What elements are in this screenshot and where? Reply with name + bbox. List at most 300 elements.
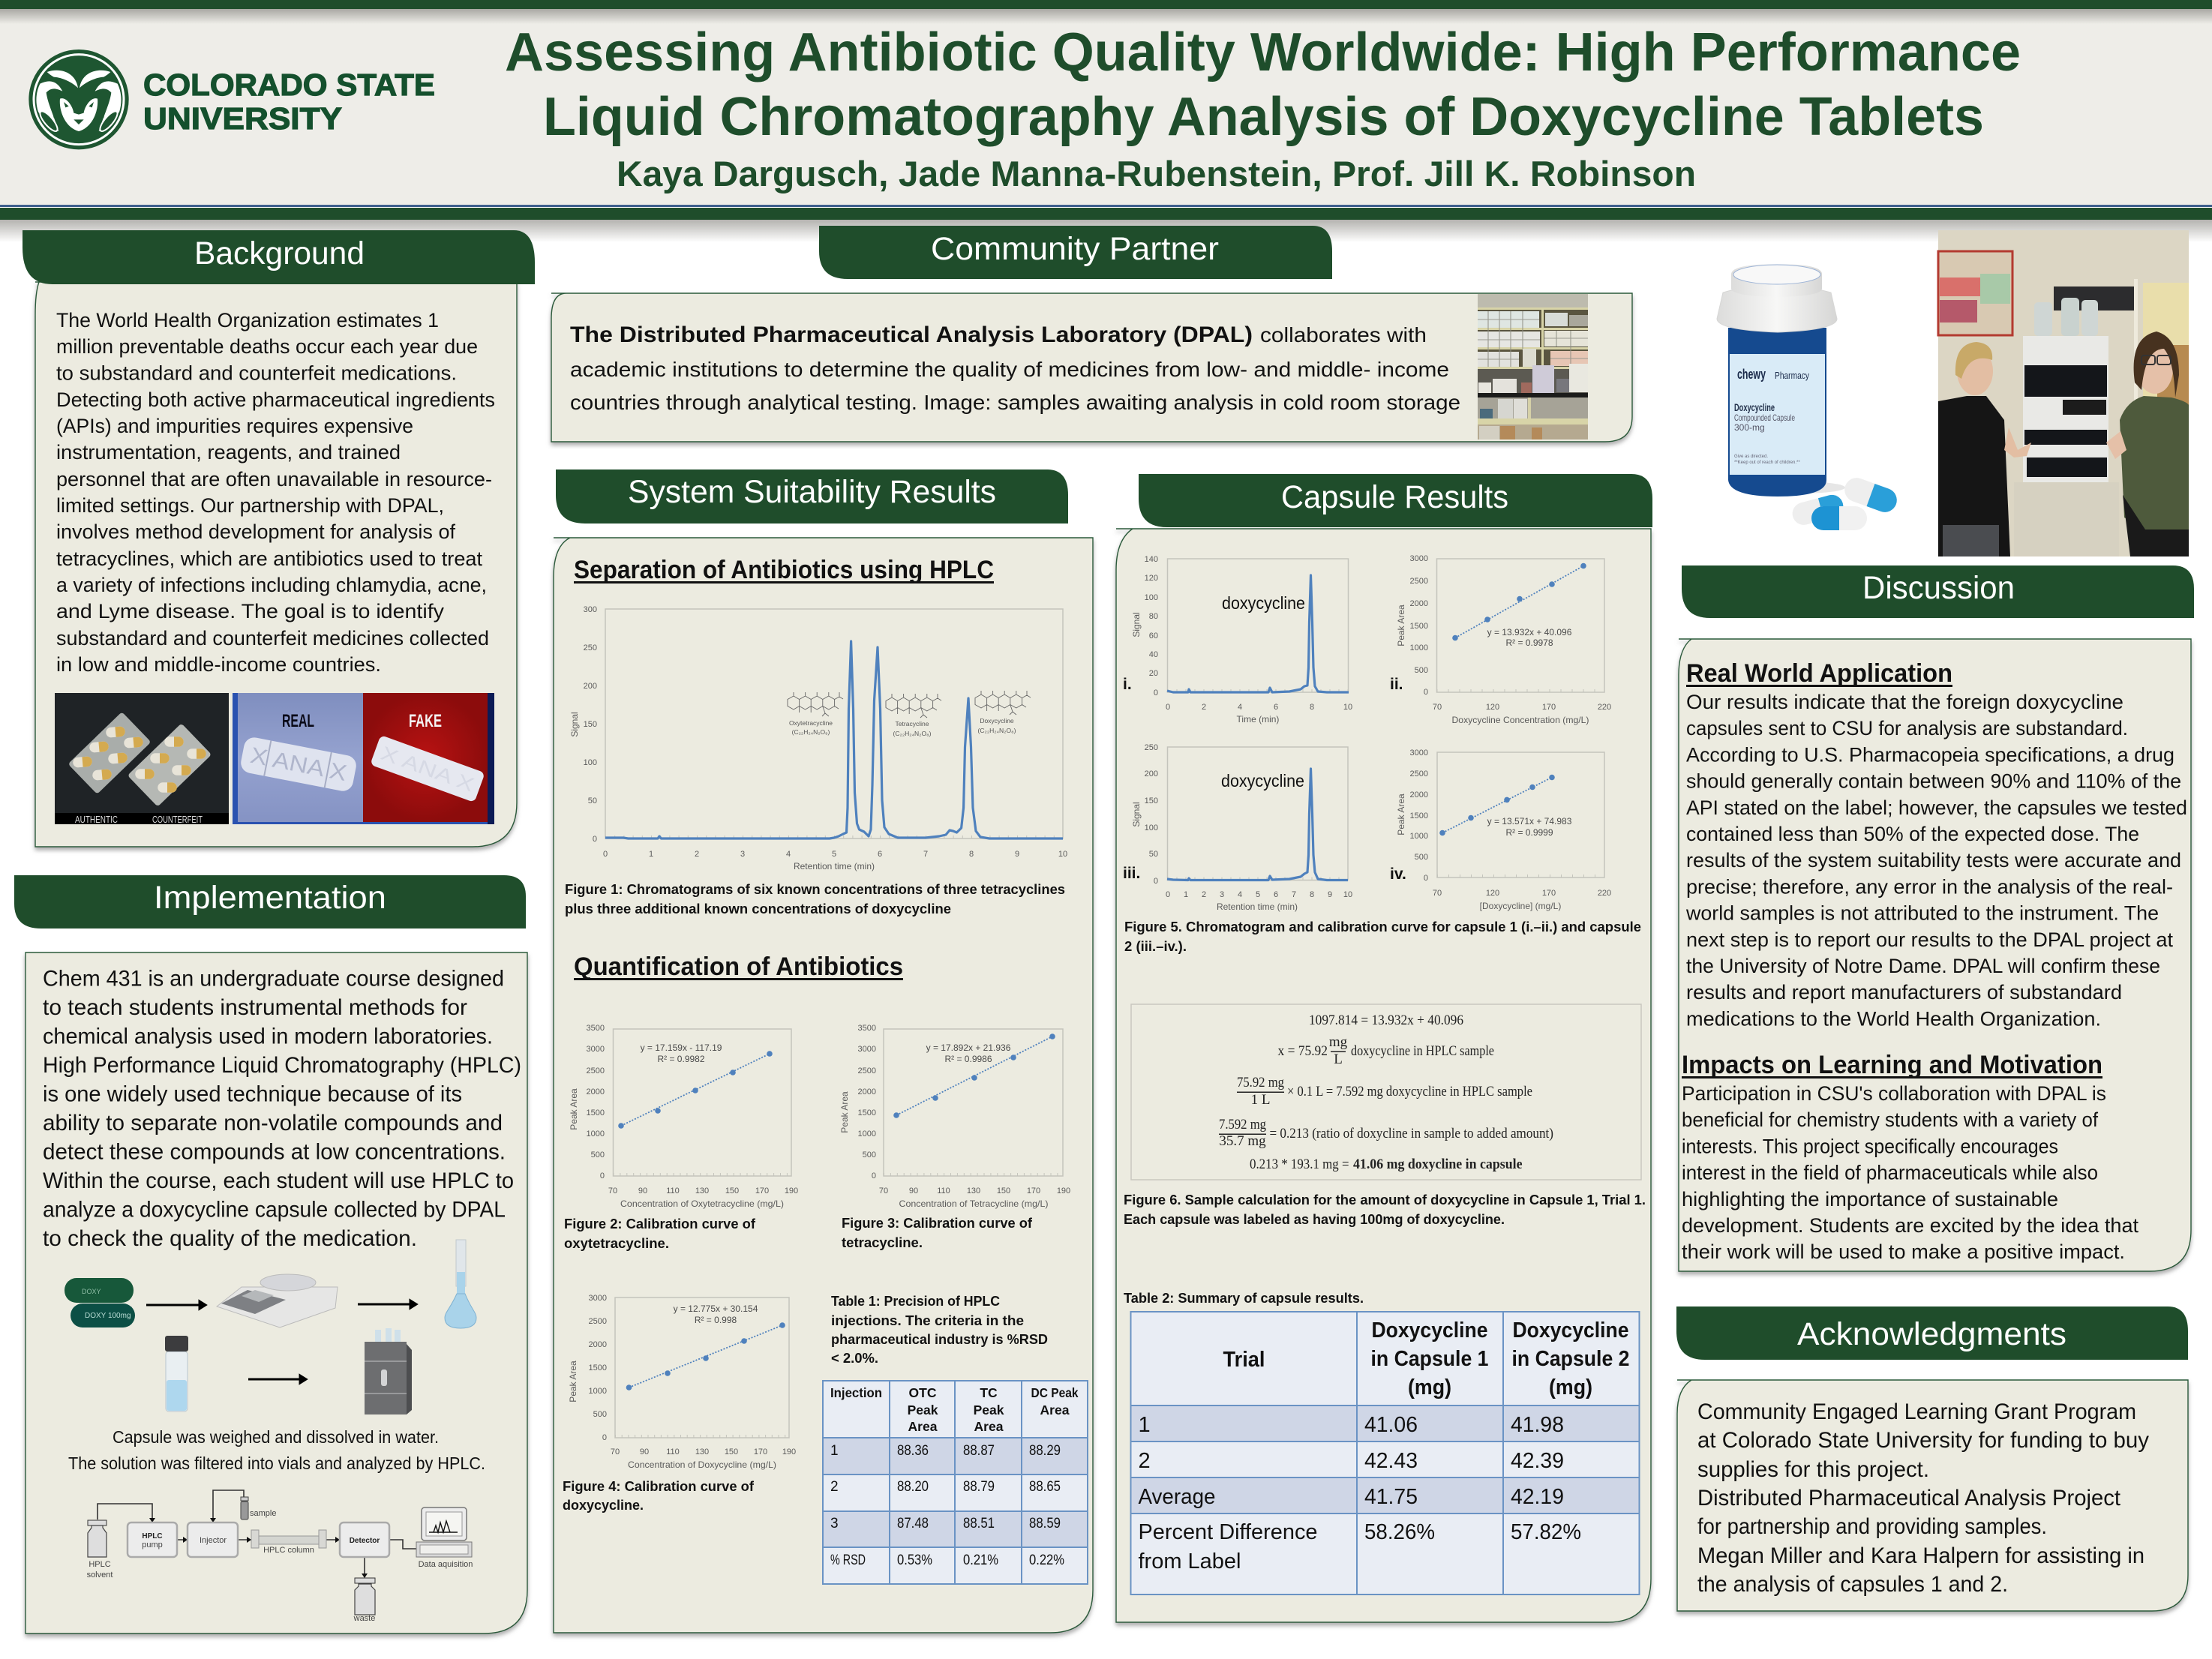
chart: figure 1 chromatogram: 150 <box>584 720 597 729</box>
section heading: real world application: Real World Application <box>1686 659 1952 688</box>
chart iv: capsule 2 calibration: [Doxycycline] (mg/L) <box>1480 901 1561 911</box>
chart: figure 2 calibration curve <box>569 1024 798 1209</box>
real world application text: medications to the World Health Organization. <box>1686 1008 2101 1030</box>
chart: figure 1 chromatogram: 50 <box>588 796 597 806</box>
chart: figure 1 chromatogram: 10 <box>1058 850 1067 859</box>
chart: figure 1 chromatogram: 2 <box>695 850 699 859</box>
table 1 caption <box>831 1294 1048 1366</box>
capsules <box>1790 475 1900 530</box>
university wordmark <box>143 68 435 136</box>
real world application text: results of the system suitability tests were accurate and <box>1686 849 2181 872</box>
real world application text: Our results indicate that the foreign doxycycline <box>1686 691 2123 713</box>
chart: figure 2 calibration curve: Concentration of Oxytetracycline (mg/L) <box>620 1198 784 1209</box>
table 1: precision of HPLC injections: TC <box>980 1385 998 1400</box>
table 1: precision of HPLC injections: 88.51 <box>963 1516 995 1532</box>
chart iv: capsule 2 calibration: 500 <box>1415 853 1428 862</box>
chart: figure 3 calibration curve: 190 <box>1057 1186 1070 1196</box>
table 2 caption: Table 2: Summary of capsule results. <box>1124 1291 1364 1306</box>
acknowledgments text: the analysis of capsules 1 and 2. <box>1697 1572 2008 1597</box>
section heading: separation: Separation of Antibiotics using HPLC <box>574 556 994 584</box>
system suitability heading <box>556 470 1068 524</box>
chart: figure 2 calibration curve: 2500 <box>587 1066 605 1076</box>
chart: figure 1 chromatogram: 6 <box>878 850 882 859</box>
student left <box>1938 342 2031 556</box>
chart: figure 1 chromatogram: Signal <box>569 712 580 737</box>
table 1: precision of HPLC injections: Peak <box>908 1402 938 1418</box>
chart ii: capsule 1 calibration: 70 <box>1433 703 1442 712</box>
figure 6: sample calculation: 1 L <box>1251 1092 1270 1108</box>
impacts text <box>1682 1082 2139 1263</box>
chart iii: capsule 2 chromatogram: 50 <box>1149 850 1158 859</box>
chart: figure 3 calibration curve: 3000 <box>858 1045 876 1054</box>
arrow <box>358 1300 416 1308</box>
chart iii: capsule 2 chromatogram: 100 <box>1145 824 1158 832</box>
chart: figure 4 calibration curve: 110 <box>666 1448 680 1456</box>
chart: figure 3 calibration curve: 2500 <box>858 1066 876 1076</box>
chart: figure 2 calibration curve: 3500 <box>587 1024 605 1033</box>
diagram: HPLC instrument schematic: pump <box>142 1540 163 1550</box>
chart: figure 4 calibration curve: 130 <box>695 1448 709 1456</box>
table 1: precision of HPLC injections: 87.48 <box>897 1516 929 1532</box>
chart iv: capsule 2 calibration: 120 <box>1486 889 1499 898</box>
panel: capsule results <box>1116 474 1652 1622</box>
table 2: summary of capsule results: 41.98 <box>1511 1413 1564 1437</box>
implementation text: ability to separate non-volatile compounds and <box>43 1111 503 1136</box>
table 2: summary of capsule results: 57.82% <box>1511 1520 1581 1544</box>
chart: figure 2 calibration curve: 150 <box>725 1186 739 1196</box>
chart ii: capsule 1 calibration: 170 <box>1542 703 1556 712</box>
capsule results heading: Capsule Results <box>1281 479 1508 515</box>
chart: figure 3 calibration curve: y = 17.892x + 21.936 <box>926 1042 1011 1053</box>
chart i: capsule 1 chromatogram <box>1123 555 1352 724</box>
figure 3 caption: tetracycline. <box>842 1235 923 1250</box>
background text: involves method development for analysis of <box>56 520 456 543</box>
chart i: capsule 1 chromatogram: 10 <box>1343 703 1352 712</box>
chart i: capsule 1 chromatogram: 0 <box>1166 703 1170 712</box>
background text: million preventable deaths occur each year due <box>56 335 478 358</box>
background text: in low and middle-income countries. <box>56 653 381 676</box>
chart ii: capsule 1 calibration <box>1390 554 1611 725</box>
background text: limited settings. Our partnership with DPAL, <box>56 494 444 517</box>
background text: and Lyme disease. The goal is to identify <box>56 600 445 622</box>
chart ii: capsule 1 calibration: 2000 <box>1410 599 1428 608</box>
photo: doxycycline pill bottle and capsules: 300-mg <box>1734 422 1765 433</box>
table 1: precision of HPLC injections: % RSD <box>830 1552 866 1568</box>
figure 5 caption: Figure 5. Chromatogram and calibration curve for capsule 1 (i.–ii.) and capsule <box>1124 920 1641 934</box>
real world application text: According to U.S. Pharmacopeia specifications, a drug <box>1686 744 2174 766</box>
table 2: summary of capsule results: 41.75 <box>1364 1485 1418 1509</box>
icon: ram head <box>29 50 129 149</box>
table 1: precision of HPLC injections: 88.36 <box>897 1443 929 1459</box>
community partner text: countries through analytical testing. Image: samples awaiting analysis in cold room storage <box>570 391 1460 414</box>
table 1: precision of HPLC injections: 1 <box>830 1443 839 1459</box>
community partner text: academic institutions to determine the quality of medicines from low- and middle- income <box>570 358 1449 381</box>
chart: figure 2 calibration curve: Peak Area <box>569 1088 579 1130</box>
chart i: capsule 1 chromatogram: 120 <box>1145 574 1158 583</box>
chart: figure 1 chromatogram <box>569 605 1067 872</box>
chart iii: capsule 2 chromatogram: 8 <box>1310 890 1314 899</box>
diagram: HPLC instrument schematic: Detector <box>350 1537 380 1545</box>
implementation text: to check the quality of the medication. <box>43 1226 417 1251</box>
chart i: capsule 1 chromatogram: 0 <box>1154 688 1158 698</box>
chart: figure 4 calibration curve <box>568 1294 796 1470</box>
chart: figure 3 calibration curve: 0 <box>872 1172 876 1180</box>
chart ii: capsule 1 calibration: Peak Area <box>1396 604 1406 646</box>
community partner heading <box>819 226 1332 279</box>
table 1: precision of HPLC injections: 88.59 <box>1029 1516 1061 1532</box>
chart iii: capsule 2 chromatogram: 150 <box>1145 796 1158 806</box>
figure 5 caption <box>1124 920 1641 954</box>
figure 3 caption <box>842 1216 1033 1250</box>
figure 6: sample calculation: 7.592 mg <box>1219 1117 1266 1132</box>
chart: figure 3 calibration curve: Peak Area <box>839 1091 850 1133</box>
photo: doxycycline pill bottle and capsules: **Keep out of reach of children.** <box>1734 460 1800 465</box>
figure 4 caption: doxycycline. <box>563 1498 644 1513</box>
table 1: precision of HPLC injections: Injection <box>830 1385 882 1400</box>
table 2: summary of capsule results: Doxycycline <box>1512 1318 1629 1342</box>
table 1: precision of HPLC injections: Area <box>908 1419 938 1434</box>
chart ii: capsule 1 calibration: 1500 <box>1410 622 1428 631</box>
implementation text <box>43 966 521 1251</box>
chart i: capsule 1 chromatogram: 4 <box>1238 703 1242 712</box>
table 1: precision of HPLC injections: Peak <box>974 1402 1004 1418</box>
impacts text: beneficial for chemistry students with a variety of <box>1682 1108 2099 1131</box>
chart i: capsule 1 chromatogram: i. <box>1123 676 1132 693</box>
table 2: summary of capsule results: Doxycycline <box>1371 1318 1488 1342</box>
real world application text: precise; therefore, any error in the analysis of the real- <box>1686 876 2173 898</box>
chart i: capsule 1 chromatogram: 80 <box>1149 612 1158 621</box>
photo: real vs fake tablets: FAKE <box>409 711 442 731</box>
figure 6 caption <box>1124 1192 1646 1227</box>
chart iii: capsule 2 chromatogram: 3 <box>1220 890 1224 899</box>
acknowledgments text: supplies for this project. <box>1697 1457 1929 1482</box>
table 2: summary of capsule results: Average <box>1139 1485 1215 1509</box>
chart iii: capsule 2 chromatogram: Signal <box>1131 802 1142 827</box>
table 2: summary of capsule results: (mg) <box>1408 1376 1451 1400</box>
table 2: summary of capsule results: 2 <box>1139 1449 1151 1473</box>
chart: figure 3 calibration curve: Concentration of Tetracycline (mg/L) <box>899 1198 1049 1209</box>
chart ii: capsule 1 calibration: 3000 <box>1410 554 1428 563</box>
real world application text: world samples is not attributed to the instrument. The <box>1685 902 2159 924</box>
implementation heading <box>14 875 526 928</box>
chart i: capsule 1 chromatogram: 100 <box>1145 593 1158 602</box>
chart: figure 3 calibration curve <box>839 1024 1070 1209</box>
chart: figure 1 chromatogram: 7 <box>923 850 928 859</box>
chart: figure 3 calibration curve: R² = 0.9986 <box>944 1054 992 1064</box>
table 1: precision of HPLC injections: 88.20 <box>897 1479 929 1495</box>
chart iv: capsule 2 calibration: 170 <box>1542 889 1556 898</box>
chart iii: capsule 2 chromatogram: 250 <box>1145 743 1158 752</box>
page header band <box>0 0 2212 242</box>
table 1: precision of HPLC injections: OTC <box>909 1385 937 1400</box>
impacts text: development. Students are excited by the idea that <box>1682 1214 2139 1237</box>
chart: figure 3 calibration curve: 70 <box>879 1186 888 1196</box>
photo: real vs fake tablets: X ANA X <box>248 743 349 786</box>
table 1 caption: Table 1: Precision of HPLC <box>831 1294 1000 1309</box>
chart iv: capsule 2 calibration: 1500 <box>1410 812 1428 820</box>
photo: doxycycline pill bottle and capsules: chewy <box>1737 367 1766 382</box>
impacts text: interests. This project specifically encourages <box>1682 1136 2058 1158</box>
impacts text: highlighting the importance of sustainable <box>1682 1188 2058 1210</box>
title <box>505 22 2021 147</box>
figure 1 caption: Figure 1: Chromatograms of six known concentrations of three tetracyclines <box>565 882 1065 897</box>
table 1: precision of HPLC injections: Area <box>974 1419 1004 1434</box>
chart iii: capsule 2 chromatogram: 9 <box>1328 890 1332 899</box>
photo: students with HPLC instrument <box>1938 230 2189 556</box>
figure 2 caption: Figure 2: Calibration curve of <box>564 1216 756 1232</box>
chart: figure 2 calibration curve: y = 17.159x - 117.19 <box>641 1042 722 1053</box>
chart: figure 1 chromatogram: 200 <box>584 682 597 691</box>
figure 1 caption: plus three additional known concentrations of doxycycline <box>565 902 951 916</box>
chart: figure 3 calibration curve: 1000 <box>858 1130 876 1138</box>
system suitability heading: System Suitability Results <box>628 474 996 510</box>
table 1: precision of HPLC injections: 88.65 <box>1029 1479 1061 1495</box>
table 2: summary of capsule results: 42.43 <box>1364 1449 1418 1473</box>
real world application text <box>1685 691 2187 1030</box>
implementation text: is one widely used technique because of its <box>43 1082 462 1107</box>
caption: sample preparation <box>68 1427 485 1473</box>
table 2: summary of capsule results: (mg) <box>1549 1376 1592 1400</box>
figure 1 caption <box>565 882 1065 916</box>
table 1: precision of HPLC injections: 2 <box>830 1479 839 1495</box>
chart: figure 4 calibration curve: y = 12.775x + 30.154 <box>674 1304 758 1314</box>
real world application text: should generally contain between 90% and 110% of the <box>1686 770 2181 792</box>
student right <box>2106 332 2189 556</box>
discussion heading <box>1682 566 2194 618</box>
impacts text: their work will be used to make a positive impact. <box>1682 1240 2125 1263</box>
chart: figure 3 calibration curve: 500 <box>863 1150 876 1160</box>
chart ii: capsule 1 calibration: R² = 0.9978 <box>1505 638 1553 648</box>
acknowledgments text: at Colorado State University for funding to buy <box>1697 1428 2149 1453</box>
impacts text: Participation in CSU's collaboration with DPAL is <box>1682 1082 2106 1105</box>
diagram: HPLC instrument schematic: sample <box>250 1509 276 1518</box>
chart: figure 1 chromatogram: 100 <box>584 758 597 767</box>
chart: figure 1 chromatogram: 300 <box>584 605 597 614</box>
photo: authentic vs counterfeit blister packs <box>55 693 229 825</box>
photo: doxycycline pill bottle and capsules: Doxycycline <box>1734 401 1775 413</box>
chart iv: capsule 2 calibration: 1000 <box>1410 832 1428 841</box>
chart ii: capsule 1 calibration: y = 13.932x + 40.096 <box>1487 627 1572 638</box>
chart iv: capsule 2 calibration: R² = 0.9999 <box>1505 827 1553 838</box>
logo: Colorado State University ram <box>29 50 435 149</box>
implementation text: analyze a doxycycline capsule collected by DPAL <box>43 1197 506 1222</box>
icon: doxycycline capsules <box>65 1278 135 1328</box>
photo: doxycycline pill bottle and capsules <box>1717 264 1900 530</box>
chart iv: capsule 2 calibration <box>1390 748 1611 911</box>
acknowledgments text: Community Engaged Learning Grant Program <box>1697 1400 2136 1424</box>
icon: balance <box>217 1274 338 1328</box>
chart: figure 1 chromatogram: 4 <box>786 850 791 859</box>
chart: figure 4 calibration curve: 2000 <box>589 1340 607 1349</box>
chart: figure 1 chromatogram: 0 <box>603 850 608 859</box>
background text: a variety of infections including chlamydia, acne, <box>56 574 487 596</box>
chart: figure 3 calibration curve: 3500 <box>858 1024 876 1033</box>
chart: figure 1 chromatogram: 3 <box>740 850 745 859</box>
table 1 caption: < 2.0%. <box>831 1351 878 1366</box>
chart: figure 4 calibration curve: 190 <box>782 1448 796 1456</box>
chart: figure 3 calibration curve: 2000 <box>858 1088 876 1096</box>
chart iv: capsule 2 calibration: 2000 <box>1410 790 1428 800</box>
university wordmark: UNIVERSITY <box>143 101 342 136</box>
figure 2 caption <box>564 1216 756 1251</box>
acknowledgments text <box>1697 1400 2149 1597</box>
diagram: HPLC instrument schematic: waste <box>353 1614 375 1623</box>
chart ii: capsule 1 calibration: 2500 <box>1410 577 1428 586</box>
figure 6 caption: Each capsule was labeled as having 100mg of doxycycline. <box>1124 1212 1505 1227</box>
chart: figure 2 calibration curve: 170 <box>755 1186 769 1196</box>
background text: (APIs) and impurities requires expensive <box>56 415 413 437</box>
molecule: oxytetracycline: (C₂₂H₂₄N₂O₉) <box>792 728 830 736</box>
panel: system suitability results <box>554 470 1093 1633</box>
panel: community partner <box>551 226 1632 442</box>
chart ii: capsule 1 calibration: 0 <box>1424 688 1428 697</box>
table 2: summary of capsule results: in Capsule 2 <box>1512 1347 1629 1371</box>
real world application text: contained less than 50% of the expected dose. The <box>1686 823 2139 845</box>
real world application text: API stated on the label; however, the capsules we tested <box>1686 796 2187 819</box>
real world application text: next step is to report our results to the DPAL project at <box>1686 928 2174 951</box>
chart iii: capsule 2 chromatogram: iii. <box>1123 865 1140 882</box>
table 1: precision of HPLC injections: DC Peak <box>1031 1385 1079 1400</box>
acknowledgments heading: Acknowledgments <box>1797 1316 2066 1352</box>
chart ii: capsule 1 calibration: 1000 <box>1410 644 1428 652</box>
figure 6: sample calculation: x = 75.92 <box>1278 1043 1328 1059</box>
implementation text: chemical analysis used in modern laboratories. <box>43 1024 493 1048</box>
chart: figure 1 chromatogram: 5 <box>832 850 836 859</box>
table 2: summary of capsule results: in Capsule 1 <box>1371 1347 1488 1371</box>
chart: figure 2 calibration curve: 3000 <box>587 1045 605 1054</box>
photo: samples in cold room storage <box>1478 294 1588 440</box>
chart iii: capsule 2 chromatogram: 4 <box>1238 890 1242 899</box>
chart iv: capsule 2 calibration: iv. <box>1390 866 1406 883</box>
chart i: capsule 1 chromatogram: Signal <box>1131 612 1142 638</box>
arrow <box>248 1376 306 1383</box>
table 2: summary of capsule results: 42.19 <box>1511 1485 1564 1509</box>
table 1: precision of HPLC injections: 0.22% <box>1029 1552 1064 1568</box>
community partner text: collaborates with <box>1260 323 1427 346</box>
chart: figure 4 calibration curve: 0 <box>602 1433 607 1442</box>
chart: figure 3 calibration curve: 150 <box>997 1186 1010 1196</box>
background text: to substandard and counterfeit medications. <box>56 362 457 384</box>
background text: personnel that are often unavailable in resource- <box>56 468 492 490</box>
chart: figure 1 chromatogram: 1 <box>649 850 653 859</box>
chart ii: capsule 1 calibration: 500 <box>1415 666 1428 675</box>
chart: figure 2 calibration curve: 110 <box>666 1186 680 1196</box>
chart iv: capsule 2 calibration: y = 13.571x + 74.983 <box>1487 816 1572 826</box>
implementation heading: Implementation <box>154 880 386 916</box>
chart iii: capsule 2 chromatogram: 10 <box>1343 890 1352 899</box>
chart iii: capsule 2 chromatogram: 5 <box>1256 890 1260 899</box>
diagram: HPLC instrument schematic: Injector <box>200 1536 227 1545</box>
table 1 caption: injections. The criteria in the <box>831 1313 1024 1328</box>
chart: figure 2 calibration curve: 1000 <box>587 1130 605 1138</box>
figure 6: sample calculation <box>1131 1004 1641 1180</box>
chart iv: capsule 2 calibration: 70 <box>1433 889 1442 898</box>
chart ii: capsule 1 calibration: ii. <box>1390 676 1403 693</box>
figure 6: sample calculation: 75.92 mg <box>1237 1075 1284 1090</box>
chart: figure 4 calibration curve: 2500 <box>589 1317 607 1326</box>
chart i: capsule 1 chromatogram: doxycycline <box>1222 593 1305 613</box>
chart: figure 2 calibration curve: 190 <box>785 1186 798 1196</box>
photo: authentic vs counterfeit blister packs: AUTHENTIC <box>75 814 118 825</box>
implementation text: Within the course, each student will use HPLC to <box>43 1168 514 1193</box>
chart i: capsule 1 chromatogram: 2 <box>1202 703 1206 712</box>
chart: figure 2 calibration curve: 130 <box>695 1186 709 1196</box>
table 1: precision of HPLC injections: 0.21% <box>963 1552 998 1568</box>
figure 6: sample calculation: 41.06 mg doxycline in capsule <box>1353 1156 1523 1172</box>
chart iv: capsule 2 calibration: 3000 <box>1410 748 1428 758</box>
chart iii: capsule 2 chromatogram: 0 <box>1154 877 1158 886</box>
authors: Kaya Dargusch, Jade Manna-Rubenstein, Prof. Jill K. Robinson <box>617 154 1696 194</box>
caption: sample preparation: Capsule was weighed and dissolved in water. <box>113 1427 439 1447</box>
icon: doxycycline capsules: DOXY <box>82 1288 101 1295</box>
chart iii: capsule 2 chromatogram: 0 <box>1166 890 1170 899</box>
diagram: HPLC instrument schematic: HPLC <box>89 1560 111 1569</box>
chart: figure 3 calibration curve: 170 <box>1027 1186 1040 1196</box>
table 2: summary of capsule results: Trial <box>1223 1348 1265 1372</box>
chart: figure 4 calibration curve: 1000 <box>589 1387 607 1396</box>
community partner heading: Community Partner <box>931 231 1219 267</box>
photo: real vs fake tablets: X ANA X <box>378 742 477 796</box>
photo: doxycycline pill bottle and capsules: Give as directed. <box>1734 454 1768 459</box>
chart iii: capsule 2 chromatogram: 6 <box>1274 890 1278 899</box>
university wordmark: COLORADO STATE <box>143 68 435 102</box>
chart i: capsule 1 chromatogram: 6 <box>1274 703 1278 712</box>
chart: figure 4 calibration curve: 170 <box>754 1448 767 1456</box>
table 1: precision of HPLC injections: 3 <box>830 1516 839 1532</box>
chart: figure 2 calibration curve: 0 <box>600 1172 605 1180</box>
table 1: precision of HPLC injections: 88.79 <box>963 1479 995 1495</box>
chart: figure 3 calibration curve: 110 <box>937 1186 950 1196</box>
table 2: summary of capsule results: Percent Difference <box>1139 1520 1317 1544</box>
figure 5 caption: 2 (iii.–iv.). <box>1124 939 1187 954</box>
capsule results heading <box>1139 474 1652 527</box>
table 2: summary of capsule results: from Label <box>1139 1550 1241 1574</box>
table 2: summary of capsule results: 42.39 <box>1511 1449 1564 1473</box>
chart iii: capsule 2 chromatogram: 200 <box>1145 770 1158 778</box>
chart ii: capsule 1 calibration: Doxycycline Concentration (mg/L) <box>1452 715 1589 725</box>
background text <box>56 309 495 676</box>
chart iv: capsule 2 calibration: 220 <box>1598 889 1611 898</box>
chart: figure 3 calibration curve: 90 <box>909 1186 918 1196</box>
panel: discussion <box>1679 566 2194 1271</box>
photo: authentic vs counterfeit blister packs: COUNTERFEIT <box>152 814 203 825</box>
chart: figure 1 chromatogram: 9 <box>1015 850 1019 859</box>
molecule: doxycycline: (C₂₂H₂₄N₂O₈) <box>978 727 1016 734</box>
chart: figure 4 calibration curve: 70 <box>611 1448 620 1456</box>
panel: implementation <box>14 875 527 1634</box>
discussion heading: Discussion <box>1862 570 2015 606</box>
section heading: quantification: Quantification of Antibiotics <box>574 952 903 981</box>
icon: vial <box>165 1336 188 1412</box>
implementation text: High Performance Liquid Chromatography (HPLC) <box>43 1053 521 1078</box>
real world application text: results and report manufacturers of substandard <box>1686 981 2122 1004</box>
molecule: oxytetracycline <box>788 692 843 736</box>
chart iii: capsule 2 chromatogram: Retention time (min) <box>1217 902 1298 912</box>
panel: acknowledgments <box>1676 1306 2188 1611</box>
figure 6: sample calculation: doxycycline in HPLC sample <box>1351 1043 1494 1059</box>
chart: figure 1 chromatogram: 8 <box>969 850 974 859</box>
acknowledgments heading <box>1676 1306 2188 1360</box>
chart: figure 4 calibration curve: 90 <box>640 1448 649 1456</box>
table 1: precision of HPLC injections <box>823 1381 1088 1584</box>
chart iv: capsule 2 calibration: 2500 <box>1410 770 1428 778</box>
diagram: HPLC instrument schematic: Data aquisition <box>419 1560 473 1569</box>
table 1: precision of HPLC injections: Area <box>1040 1402 1070 1418</box>
table 2: summary of capsule results: 1 <box>1139 1413 1151 1437</box>
figure 6: sample calculation: 0.213 * 193.1 mg = <box>1250 1156 1349 1172</box>
chart: figure 2 calibration curve: 70 <box>608 1186 617 1196</box>
chart: figure 2 calibration curve: 1500 <box>587 1108 605 1118</box>
